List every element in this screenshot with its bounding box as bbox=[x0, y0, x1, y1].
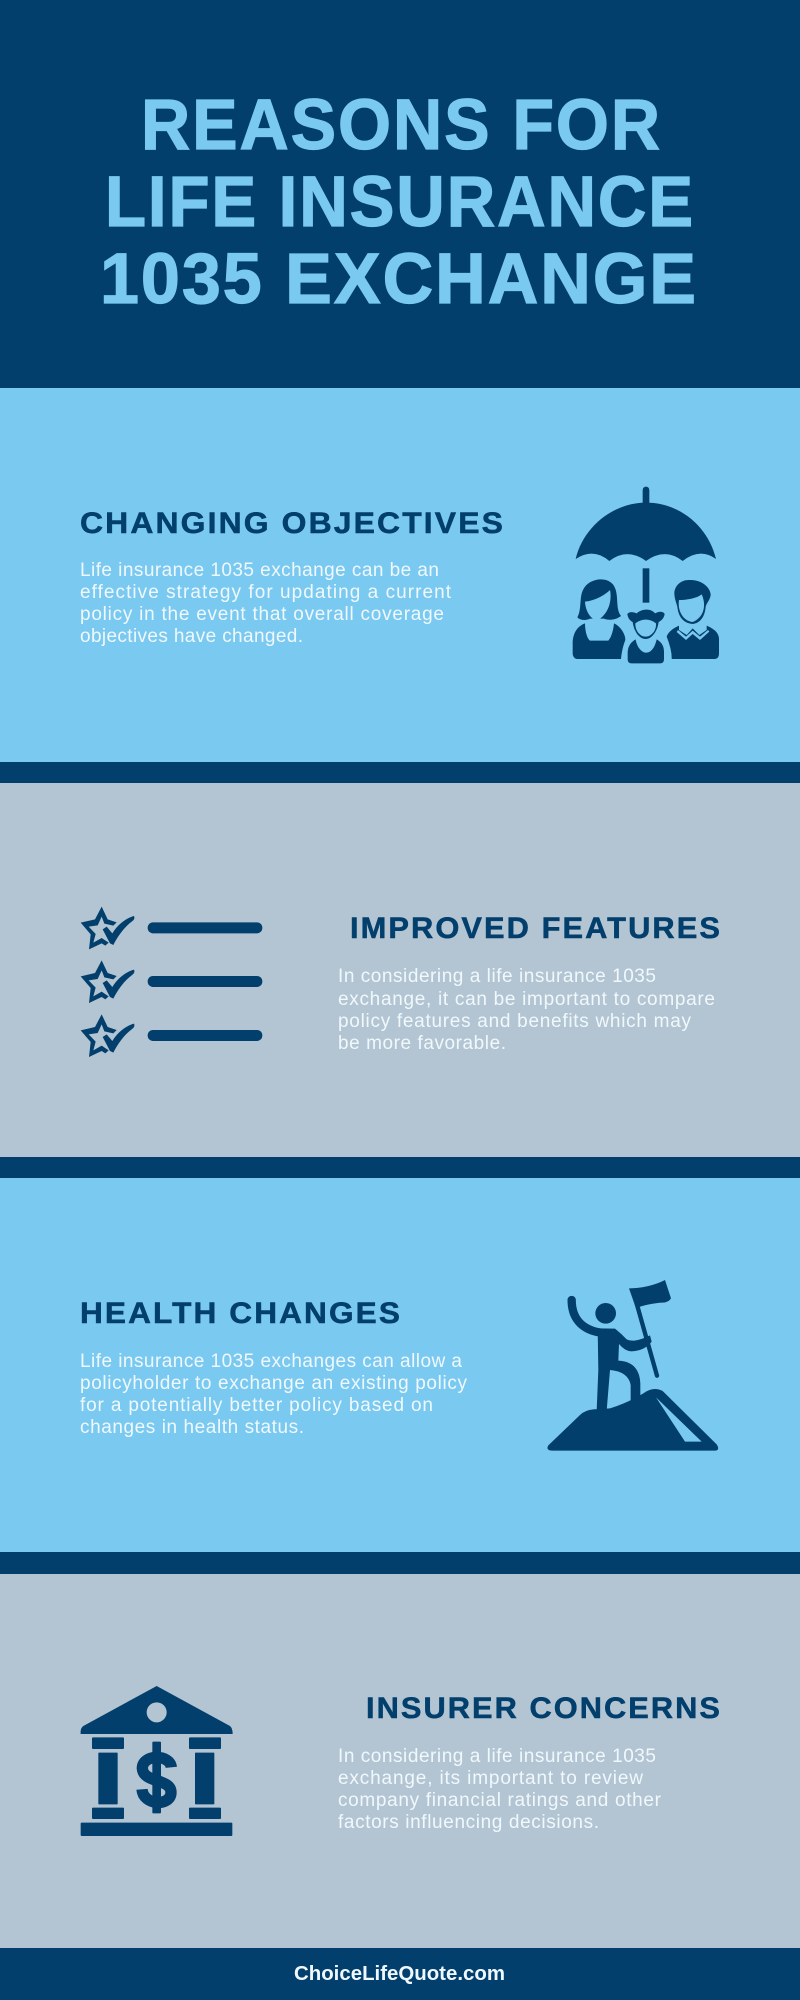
text block: health changes: Life insurance 1035 exchanges can allow a bbox=[80, 1351, 462, 1372]
icon: star checklist bbox=[81, 907, 262, 1057]
text block: changing objectives: Life insurance 1035 exchange can be an bbox=[80, 560, 439, 581]
text block: changing objectives bbox=[80, 560, 452, 647]
text block: improved features: exchange, it can be important to compare bbox=[338, 989, 715, 1010]
panel: improved features bbox=[0, 783, 800, 1157]
text block: changing objectives: policy in the event that overall coverage bbox=[80, 604, 444, 625]
text block: insurer concerns: In considering a life insurance 1035 bbox=[338, 1746, 656, 1767]
title: 1035 EXCHANGE bbox=[100, 240, 698, 319]
title: REASONS FOR bbox=[141, 86, 662, 165]
text block: health changes: for a potentially better policy based on bbox=[80, 1395, 433, 1416]
heading: changing objectives: CHANGING OBJECTIVES bbox=[80, 507, 505, 540]
panel: footer bbox=[0, 1948, 800, 2000]
panel: health changes bbox=[0, 1178, 800, 1552]
text block: health changes: policyholder to exchange an existing policy bbox=[80, 1373, 468, 1394]
text block: improved features bbox=[338, 966, 715, 1054]
footer website text: ChoiceLifeQuote.com bbox=[294, 1963, 505, 1985]
title: LIFE INSURANCE bbox=[105, 163, 695, 242]
text block: insurer concerns: exchange, its important to review bbox=[338, 1768, 643, 1789]
divider bar bbox=[0, 762, 800, 783]
icon: climber with flag on mountain bbox=[547, 1280, 718, 1451]
icon: bank with dollar sign bbox=[81, 1686, 233, 1836]
text block: health changes: changes in health status. bbox=[80, 1417, 304, 1438]
text block: changing objectives: effective strategy for updating a current bbox=[80, 582, 452, 603]
panel: insurer concerns bbox=[0, 1574, 800, 1948]
panel: header background bbox=[0, 0, 800, 388]
heading: health changes: HEALTH CHANGES bbox=[80, 1297, 402, 1330]
divider bar bbox=[0, 1157, 800, 1178]
divider bar bbox=[0, 1552, 800, 1574]
text block: health changes bbox=[80, 1351, 468, 1438]
text block: improved features: In considering a life insurance 1035 bbox=[338, 966, 656, 987]
text block: insurer concerns: factors influencing decisions. bbox=[338, 1812, 599, 1833]
text block: changing objectives: objectives have changed. bbox=[80, 626, 303, 647]
title bbox=[100, 86, 698, 319]
heading: improved features: IMPROVED FEATURES bbox=[350, 912, 722, 945]
text block: improved features: policy features and benefits which may bbox=[338, 1011, 692, 1032]
heading: insurer concerns: INSURER CONCERNS bbox=[366, 1692, 722, 1725]
text block: insurer concerns: company financial ratings and other bbox=[338, 1790, 662, 1811]
text block: improved features: be more favorable. bbox=[338, 1033, 506, 1054]
icon: umbrella over family bbox=[573, 487, 719, 663]
text block: insurer concerns bbox=[338, 1746, 662, 1833]
panel: changing objectives bbox=[0, 388, 800, 762]
